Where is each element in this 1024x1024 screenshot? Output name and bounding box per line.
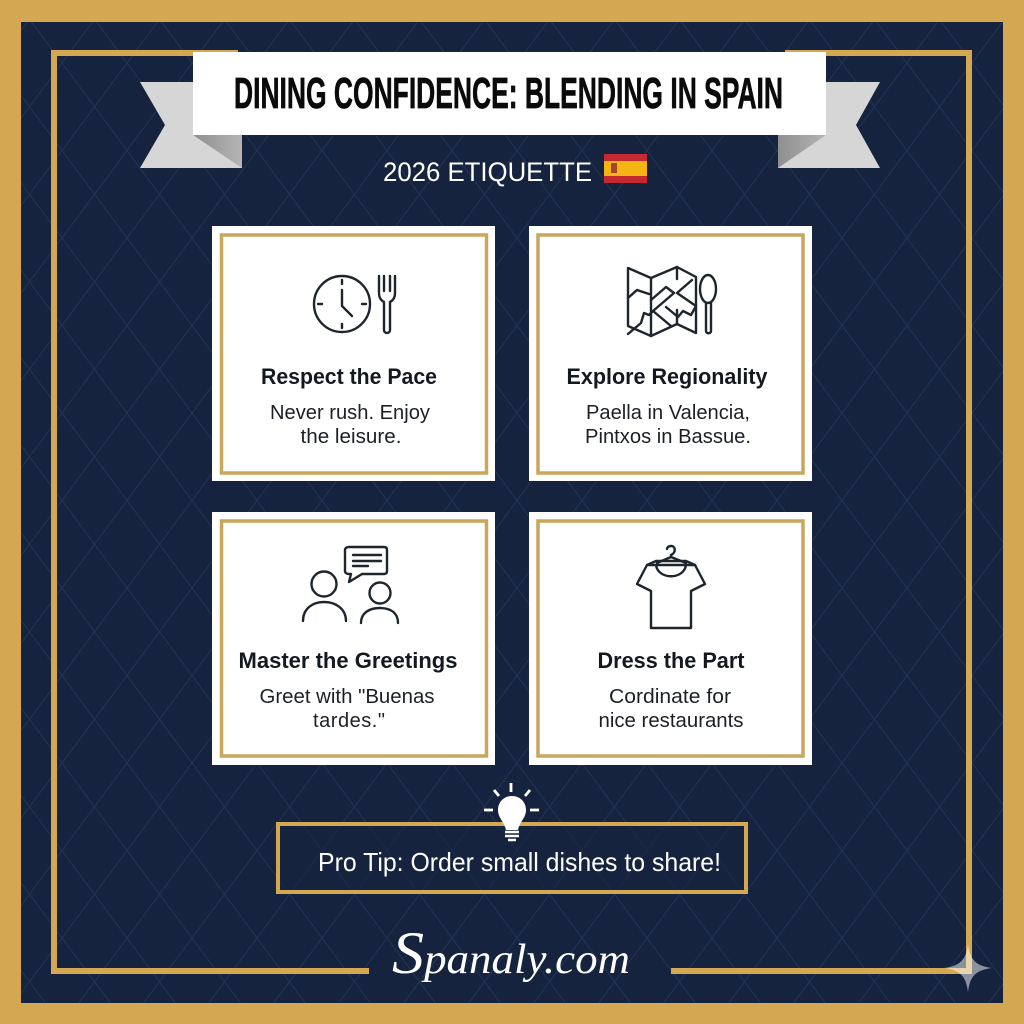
panel: dress the part <box>529 512 812 765</box>
description <box>270 402 430 448</box>
heading: Dress the Part <box>598 648 745 673</box>
callout: pro tip <box>278 824 746 892</box>
description <box>598 686 744 732</box>
description: Cordinate for <box>609 686 731 708</box>
pro tip text: Pro Tip: Order small dishes to share! <box>318 847 721 877</box>
subtitle with flag: 2026 ETIQUETTE <box>383 157 592 187</box>
brand: Spanaly.com: Spanaly.com <box>392 920 630 986</box>
heading: Master the Greetings <box>238 648 458 673</box>
icon: Spanish flag <box>604 154 647 183</box>
icon: sparkle <box>944 944 992 992</box>
description <box>260 686 434 732</box>
icon: light bulb <box>484 783 539 840</box>
right ribbon tail <box>778 82 880 168</box>
description: the leisure. <box>300 426 402 448</box>
icon: clock and fork <box>314 276 395 333</box>
panel: explore regionality <box>529 226 812 481</box>
description: Never rush. Enjoy <box>270 402 430 424</box>
description: Pintxos in Bassue. <box>585 426 751 448</box>
description: Greet with "Buenas <box>260 686 434 708</box>
description <box>585 402 751 448</box>
description: tardes." <box>313 710 385 732</box>
title ribbon <box>140 52 880 168</box>
description: Paella in Valencia, <box>586 402 750 424</box>
icon: two people with speech bubble <box>303 547 398 623</box>
icon: shirt on hanger <box>637 546 705 628</box>
panel: respect the pace <box>212 226 495 481</box>
heading: Explore Regionality <box>566 364 768 389</box>
panel: master the greetings <box>212 512 495 765</box>
description: nice restaurants <box>598 710 744 732</box>
left ribbon tail <box>140 82 242 168</box>
icon: map and spoon <box>628 267 716 336</box>
heading: Respect the Pace <box>261 364 437 389</box>
